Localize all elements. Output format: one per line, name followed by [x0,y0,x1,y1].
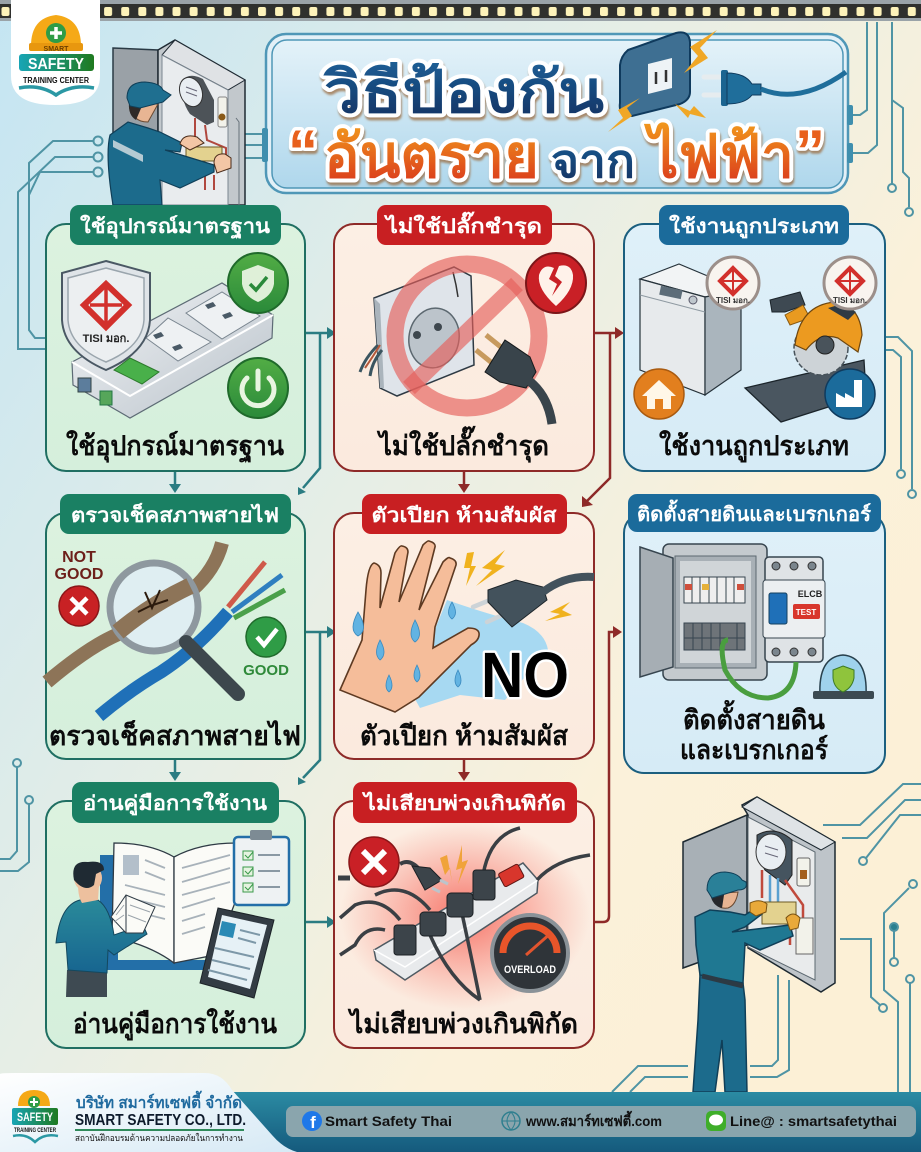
panel: do not overload the power strip [334,782,594,1048]
label: ไม่ใช้ปลั๊กชำรุด [376,426,549,463]
technician at meter cabinet (top left) [108,40,245,205]
small logo: TRAINING CENTER [14,1128,56,1134]
label: ตรวจเช็คสภาพสายไฟ [49,718,301,751]
icon: blue plug and cable [704,70,846,106]
prohibition sign [395,264,539,408]
TISI shield: TISI มอก. [83,333,129,345]
facebook: Smart Safety Thai [325,1113,452,1129]
label: และเบรกเกอร์ [680,734,828,765]
panel: use standard equipment [46,205,305,471]
damaged brown cable [47,543,222,682]
overloaded power strip [340,828,590,1000]
magnifying glass [110,563,238,694]
tablet [200,908,274,998]
icon: wall socket with sparks [608,30,717,132]
contact bar [286,1106,916,1137]
panel: use by correct type [624,205,885,471]
label: ไม่เสียบพ่วงเกินพิกัด [347,1008,578,1039]
TISI shield [62,261,150,370]
panel: no damaged plugs [334,205,594,471]
company block [0,1073,297,1152]
logo: Smart Safety Training Center: SMART [44,46,69,53]
water splash [410,600,548,708]
TIS badge two: TISI มอก. [833,296,867,305]
label: ใช้งานถูกประเภท [659,430,849,463]
not good marker [55,549,103,626]
logo: Smart Safety Training Center [11,0,100,105]
header: ตัวเปียก ห้ามสัมผัส [372,504,557,527]
good marker [243,617,289,679]
panel: do not touch when wet [334,494,594,759]
line: Line@ : smartsafetythai [730,1113,897,1129]
header [60,494,291,534]
website [502,1110,662,1130]
header: อ่านคู่มือการใช้งาน [83,791,267,817]
label: ใช้อุปกรณ์มาตรฐาน [66,430,284,464]
label: ตัวเปียก ห้ามสัมผัส [360,721,568,751]
header [353,782,577,823]
plug and sparks [464,550,594,627]
label: ติดตั้งสายดิน [683,699,826,735]
cabinet [113,40,245,205]
header: ไม่เสียบพ่วงเกินพิกัด [362,791,566,815]
company block: สถาบันฝึกอบรมด้านความปลอดภัยในการทำงาน [75,1133,243,1143]
good marker: GOOD [243,662,289,679]
facebook: f [310,1113,316,1132]
header [72,782,279,823]
header [628,494,881,532]
technician at meter cabinet (bottom right) [683,797,835,1092]
company block: SMART SAFETY CO., LTD. [75,1112,246,1129]
panel: check wire condition [46,494,305,759]
NO text: NO [481,639,569,711]
not good marker: NOT [62,549,96,566]
icon: factory [825,369,875,419]
clipboard checklist [234,830,289,905]
logo: Smart Safety Training Center: TRAINING CENTER [23,76,89,85]
not good marker: GOOD [55,566,103,583]
red glow [340,820,590,1010]
title line two: ” [795,118,825,185]
header [70,205,281,245]
header: ติดตั้งสายดินและเบรกเกอร์ [637,499,871,526]
worker [108,82,231,205]
worker [693,872,800,1092]
header: ไม่ใช้ปลั๊กชำรุด [384,211,542,239]
label [680,699,828,765]
electrical panel [640,544,767,680]
header: ตรวจเช็คสภาพสายไฟ [71,502,279,527]
title line one: วิธีป้องกัน [322,60,604,125]
open manual book [100,843,236,970]
website: www.สมาร์ทเซฟตี้.com [525,1110,662,1129]
icon: broken heart [526,253,586,313]
cut-off saw [745,292,866,422]
title line two: อันตราย [324,123,539,190]
header: ใช้อุปกรณ์มาตรฐาน [80,214,270,240]
protective dome with shield [813,655,874,699]
title banner [262,30,853,193]
disconnected plug [338,862,448,892]
header [377,205,552,245]
label: อ่านคู่มือการใช้งาน [73,1008,277,1041]
cabinet [683,797,835,992]
header [659,205,849,245]
power strip [72,283,273,418]
line [706,1111,897,1131]
green ground wire [722,640,796,698]
title line two: จาก [551,135,635,187]
wet hand [340,541,479,712]
title line two: ไฟฟ้า [643,121,794,190]
icon: power button [228,358,288,418]
TIS badge one: TISI มอก. [716,296,750,305]
icon: green shield check [228,253,288,313]
overload gauge [492,915,568,991]
ELCB breaker [763,557,825,662]
panel: read the manual [46,782,305,1048]
header: ใช้งานถูกประเภท [669,214,839,240]
top LED strip [0,0,921,22]
title line two: “ [288,118,318,185]
plug and cable [476,335,552,424]
washing machine [640,264,741,395]
panel: install ground wire and breaker [624,494,885,773]
person reading [56,862,155,997]
logo: Smart Safety Training Center: SAFETY [28,56,84,73]
ELCB breaker: ELCB [798,589,823,599]
overload gauge: OVERLOAD [504,964,556,976]
icon: home [634,369,684,419]
title line two [288,118,825,190]
ELCB breaker: TEST [796,608,816,617]
blue cable [99,562,285,716]
header [362,494,567,534]
icon: cross [349,837,399,887]
damaged socket [360,267,474,396]
TIS badge two [824,257,876,309]
flow connectors [169,327,624,928]
footer band [0,1073,921,1152]
facebook [302,1111,452,1132]
small logo [12,1090,58,1142]
company names: บริษัท สมาร์ทเซฟตี้ จำกัด [76,1090,242,1112]
small logo: SAFETY [17,1110,53,1124]
TIS badge one [707,257,759,309]
